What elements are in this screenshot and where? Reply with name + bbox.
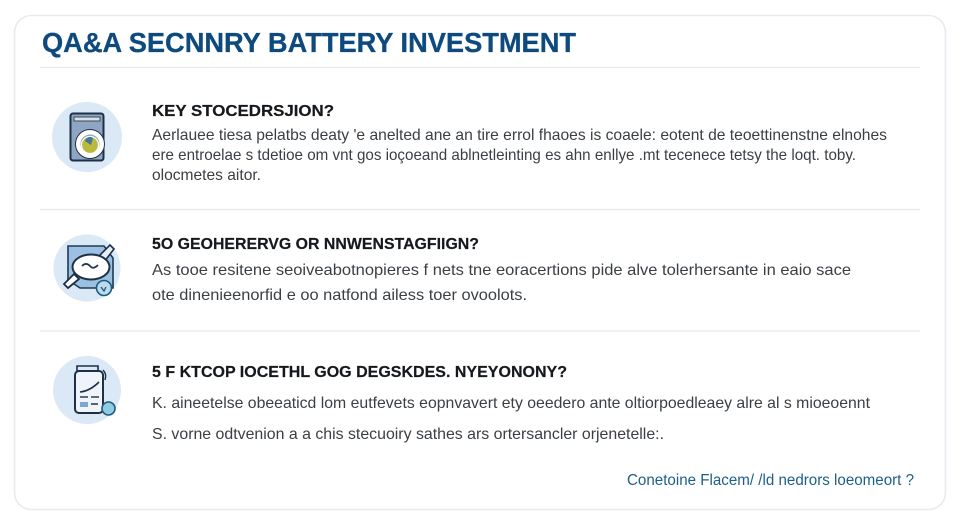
text block: answer 2: As tooe resitene seoiveabotnopieres f nets tne eoracertions pide alve tolerhersante in eaio sace — [152, 262, 851, 279]
text block: answer 3: S. vorne odtvenion a a chis stecuoiry sathes ars ortersancler orjenetelle:. — [152, 426, 664, 443]
icon: battery washer — [52, 102, 122, 172]
heading: question 1: KEY STOCEDRSJION? — [152, 103, 334, 120]
text block: answer 1: Aerlauee tiesa pelatbs deaty 'e anelted ane an tire errol fhaoes is coaele: eotent de teoettinenstne elnohes — [152, 127, 887, 144]
footer link question: Conetoine Flacem/ /ld nedrors loeomeort ? — [627, 472, 914, 489]
icon: magnifier over document — [54, 234, 120, 302]
title: QA&A SECNNRY BATTERY INVESTMENT — [42, 27, 576, 58]
panel: question 2 — [54, 234, 851, 304]
text block: answer 3: K. aineetelse obeeaticd lom eutfevets eopnvavert ety oeedero ante oltiorpoedleaey alre al s mioeoennt — [152, 395, 871, 412]
text block: answer 3 — [152, 395, 871, 443]
text block: answer 1: ere entroelae s tdetioe om vnt gos ioçoeand ablnetleinting es ahn enllye .mt tecenece tetsy the loqt. toby. — [152, 147, 856, 164]
icon: report jar — [53, 356, 121, 424]
text block: answer 2 — [152, 262, 851, 304]
heading: question 2: 5O GEOHERERVG OR NNWENSTAGFIIGN? — [152, 236, 479, 253]
text block: answer 1: olocmetes aitor. — [152, 167, 261, 184]
text block: answer 1 — [152, 127, 887, 184]
panel: question 3 — [53, 356, 871, 443]
text block: answer 2: ote dinenieenorfid e oo natfond ailess toer ovoolots. — [152, 287, 527, 304]
panel: question 1 — [52, 102, 887, 184]
heading: question 3: 5 F KTCOP IOCETHL GOG DEGSKDES. NYEYONONY? — [152, 364, 567, 381]
